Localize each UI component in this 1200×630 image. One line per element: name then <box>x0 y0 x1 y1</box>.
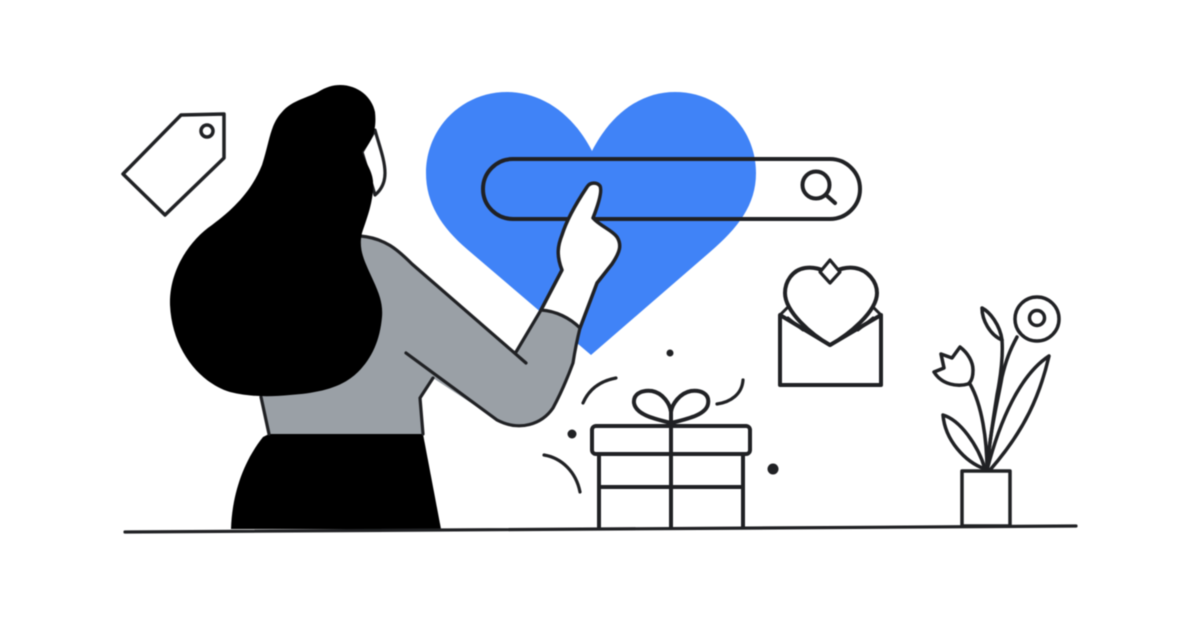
hand and forearm <box>541 183 620 328</box>
long leaf <box>987 356 1049 470</box>
sweater torso and sleeve <box>261 236 580 434</box>
face <box>362 130 385 195</box>
icon: price tag <box>123 114 224 215</box>
gift bow <box>634 391 708 423</box>
icon: envelope with heart <box>780 260 881 385</box>
woman figure <box>170 85 620 529</box>
icon: gift box <box>592 391 750 527</box>
skirt <box>231 434 441 529</box>
sweater outlines <box>261 236 580 434</box>
confetti <box>544 350 778 492</box>
search bar <box>483 159 860 219</box>
icon: magnifier <box>802 172 835 203</box>
icon: blue heart <box>426 92 756 355</box>
bud leaf <box>982 308 1002 340</box>
flower <box>1015 297 1059 341</box>
icon: potted plant <box>934 297 1059 526</box>
tulip <box>970 384 987 470</box>
left leaf <box>943 415 985 469</box>
ground line <box>125 526 1076 532</box>
hair <box>170 85 382 396</box>
